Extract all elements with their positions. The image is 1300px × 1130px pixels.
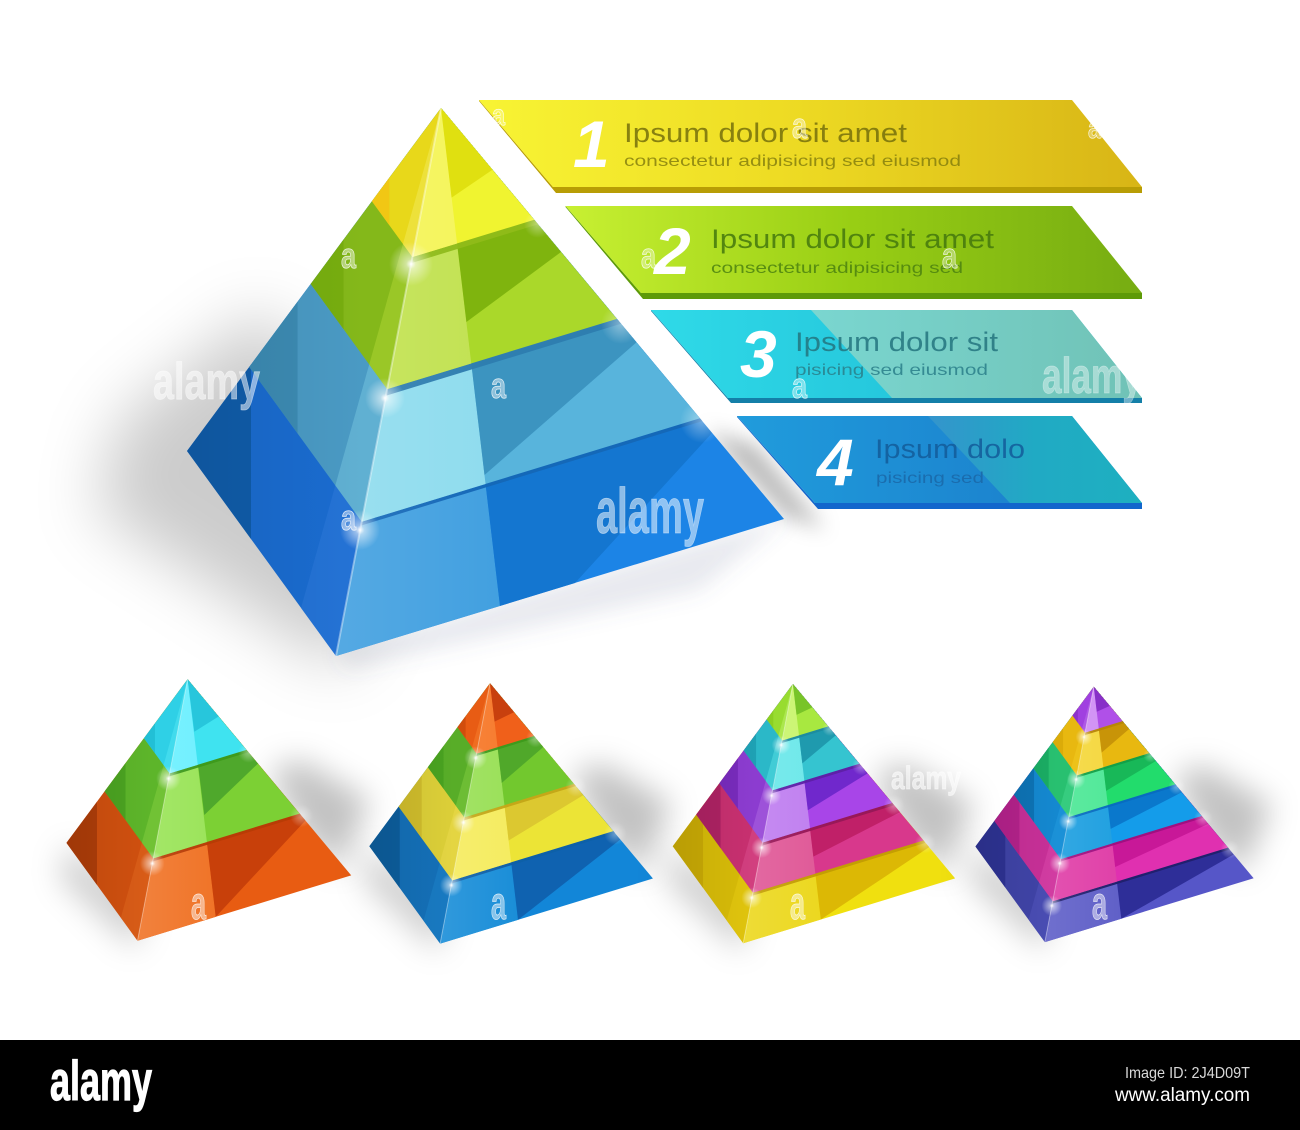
sparkles [1042, 729, 1239, 916]
tier 5: magenta [994, 687, 1228, 901]
main pyramid [187, 108, 784, 656]
gloss overlay [369, 683, 518, 944]
main tier 2: green [311, 108, 617, 389]
heading 3: Ipsum dolor sit [795, 327, 999, 357]
watermarks: a [792, 105, 808, 146]
heading 2: Ipsum dolor sit amet [711, 224, 995, 254]
watermarks: a [1092, 877, 1107, 929]
gloss overlay [975, 687, 1121, 942]
small pyramid 3: five tiers [666, 684, 974, 952]
watermarks: alamy [891, 760, 961, 796]
number 4: 4 [815, 425, 854, 499]
number 1: 1 [573, 107, 610, 181]
tier 3: purple [719, 684, 892, 843]
shadow [60, 760, 370, 950]
tier 1: lime [767, 684, 828, 741]
watermarks [153, 99, 1142, 929]
main tier 1: yellow [372, 108, 534, 257]
sparkles [440, 728, 627, 897]
tier 2: green [428, 683, 574, 817]
watermarks: a [341, 235, 357, 276]
watermarks: a [942, 235, 958, 276]
sparkles [741, 721, 936, 908]
tier 1: cyan [144, 679, 246, 773]
website: www.alamy.com [1114, 1085, 1250, 1106]
tier 4: blue [1014, 687, 1202, 859]
main tier 4: deep blue [187, 108, 784, 656]
subheading 1: consectetur adipisicing sed eiusmod [624, 153, 961, 170]
heading 4: Ipsum dolo [875, 434, 1025, 464]
banner 4 [737, 416, 1142, 509]
tier 2: green [105, 679, 300, 858]
heading 1: Ipsum dolor sit amet [624, 118, 908, 148]
footer logo: alamy [50, 1049, 152, 1112]
banner 3 [651, 310, 1142, 403]
subheading 3: pisicing sed eiusmod [795, 362, 988, 379]
watermarks: a [790, 877, 805, 929]
watermarks: a [1088, 112, 1101, 145]
number 2: 2 [652, 214, 691, 288]
shadow [363, 764, 671, 953]
tier 2: gold [1053, 687, 1149, 775]
tier 6: indigo [975, 687, 1254, 942]
tier 3: orange [66, 679, 351, 941]
number 3: 3 [740, 317, 777, 391]
sparkles [140, 742, 313, 876]
watermarks: a [491, 365, 507, 406]
tier 1: orange [457, 683, 534, 754]
image id: Image ID: 2J4D09T [1125, 1065, 1250, 1082]
main pyramid shadow [95, 310, 825, 670]
gloss overlay [673, 684, 821, 943]
banner 2 [566, 206, 1142, 299]
tier 4: magenta [696, 684, 924, 893]
subheading 2: consectetur adipisicing sed [711, 260, 963, 277]
gloss overlay [66, 679, 216, 941]
watermarks: alamy [596, 475, 704, 547]
banner 1 [479, 100, 1142, 193]
watermarks: a [492, 99, 505, 132]
main tier 3: light blue [249, 108, 700, 522]
subheading 4: pisicing sed [876, 470, 984, 487]
tier 1: violet [1072, 687, 1123, 733]
main gloss overlay [187, 108, 500, 656]
small pyramid 2: four tiers [363, 683, 671, 953]
watermarks: alamy [153, 353, 260, 411]
tier 3: yellow [399, 683, 613, 880]
tier 2: teal [744, 684, 859, 790]
tier 3: green [1033, 687, 1175, 817]
watermarks: a [341, 497, 357, 538]
watermarks: a [191, 877, 206, 929]
watermarks: a [792, 365, 808, 406]
watermarks: a [641, 235, 657, 276]
watermarks: alamy [1042, 348, 1142, 404]
tier 4: blue [369, 683, 653, 944]
watermarks: a [491, 877, 506, 929]
small pyramid 1: three tiers [60, 679, 370, 950]
tier 5: yellow [673, 684, 955, 943]
footer bar [0, 1040, 1300, 1130]
main sparkles [340, 210, 724, 550]
small pyramid 4: six tiers [969, 687, 1272, 951]
shadow [969, 765, 1272, 951]
shadow [666, 764, 974, 952]
